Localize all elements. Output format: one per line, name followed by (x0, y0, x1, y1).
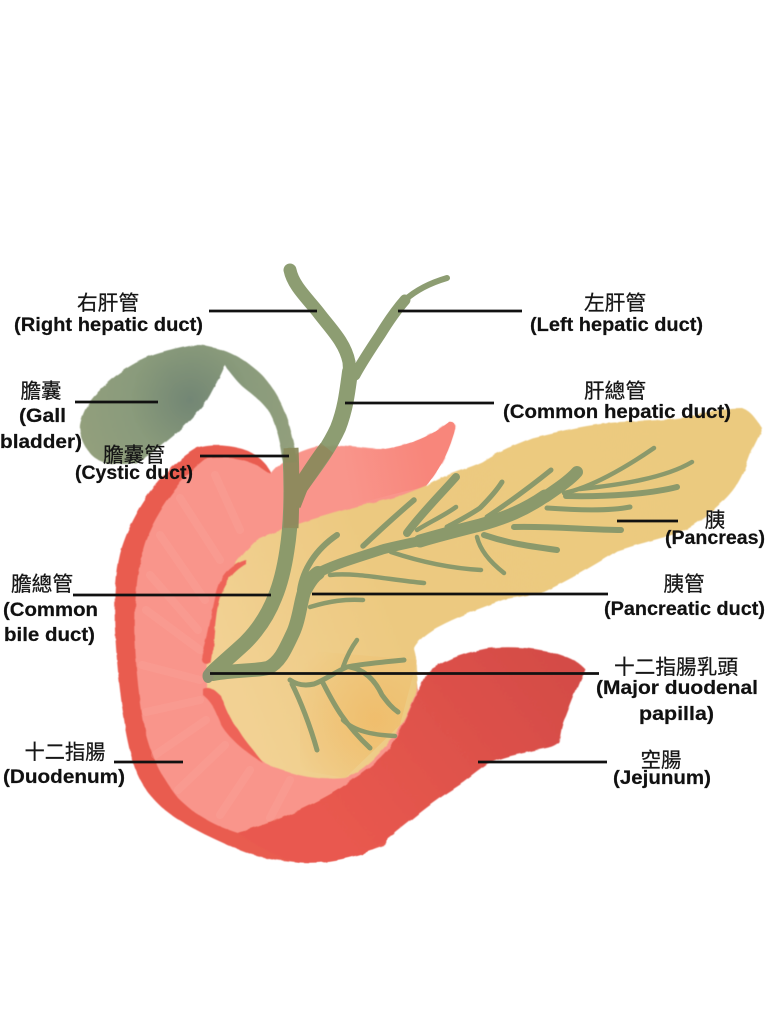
duodenum outer wall (115, 445, 420, 862)
label: right hepatic duct: 右肝管 (77, 292, 139, 315)
right hepatic duct (290, 270, 350, 378)
label: common bile duct: bile duct) (4, 624, 95, 646)
label: pancreas: 胰 (705, 509, 725, 532)
duodenum inner lining (135, 422, 455, 833)
pancreatic duct branches (290, 448, 692, 750)
inner duodenal wall, upper (202, 560, 246, 664)
label: common hepatic duct (345, 380, 731, 423)
label: jejunum (478, 749, 711, 789)
label: jejunum: (Jejunum) (613, 767, 711, 789)
label: gall bladder: bladder) (0, 431, 82, 453)
label: right hepatic duct (14, 292, 317, 336)
ducts tint over duodenum (291, 448, 327, 528)
label: common bile duct: 膽總管 (11, 573, 73, 596)
label: common hepatic duct: (Common hepatic duct) (503, 401, 731, 423)
common hepatic duct (292, 372, 350, 505)
left hepatic duct (405, 278, 447, 300)
label: gall bladder: (Gall (19, 405, 66, 427)
label: duodenum (3, 741, 183, 788)
label: jejunum: 空腸 (640, 749, 682, 772)
jejunum (238, 647, 585, 863)
label: left hepatic duct: (Left hepatic duct) (530, 314, 703, 336)
label: cystic duct: 膽囊管 (103, 444, 165, 467)
label: left hepatic duct: 左肝管 (584, 292, 646, 315)
label: pancreatic duct: (Pancreatic duct) (604, 598, 765, 620)
label: cystic duct: (Cystic duct) (75, 462, 193, 484)
label: common hepatic duct: 肝總管 (584, 380, 646, 403)
label: major duodenal papilla: 十二指腸乳頭 (614, 656, 739, 679)
label: gall bladder: 膽囊 (20, 380, 62, 403)
label: pancreatic duct: 胰管 (664, 573, 704, 596)
major duodenal papilla (202, 669, 214, 683)
label: pancreas (617, 509, 765, 549)
main pancreatic duct (213, 472, 577, 674)
label: right hepatic duct: (Right hepatic duct) (14, 314, 203, 336)
label: duodenum: (Duodenum) (3, 766, 125, 788)
left hepatic duct lower (355, 300, 405, 375)
label: pancreas: (Pancreas) (665, 527, 765, 549)
duodenum (115, 422, 455, 862)
label: major duodenal papilla (210, 656, 758, 725)
label: gall bladder (0, 380, 158, 453)
inner duodenal wall, lower (203, 688, 263, 763)
label: common bile duct: (Common (3, 599, 98, 621)
label: pancreatic duct (312, 573, 765, 620)
label: duodenum: 十二指腸 (24, 741, 106, 764)
label: common bile duct (3, 573, 271, 646)
pancreas (206, 408, 762, 779)
gall bladder (80, 345, 297, 464)
duodenum folds (142, 475, 290, 818)
label: cystic duct (75, 444, 289, 484)
label: major duodenal papilla: papilla) (639, 703, 714, 725)
label: left hepatic duct (398, 292, 703, 336)
bile and pancreatic ducts (212, 270, 692, 750)
common bile duct (212, 455, 291, 673)
duodenum upper flap tint (345, 422, 455, 508)
pancreas head shading (300, 650, 417, 778)
pancreas body (206, 408, 762, 779)
label: major duodenal papilla: (Major duodenal (596, 677, 758, 699)
